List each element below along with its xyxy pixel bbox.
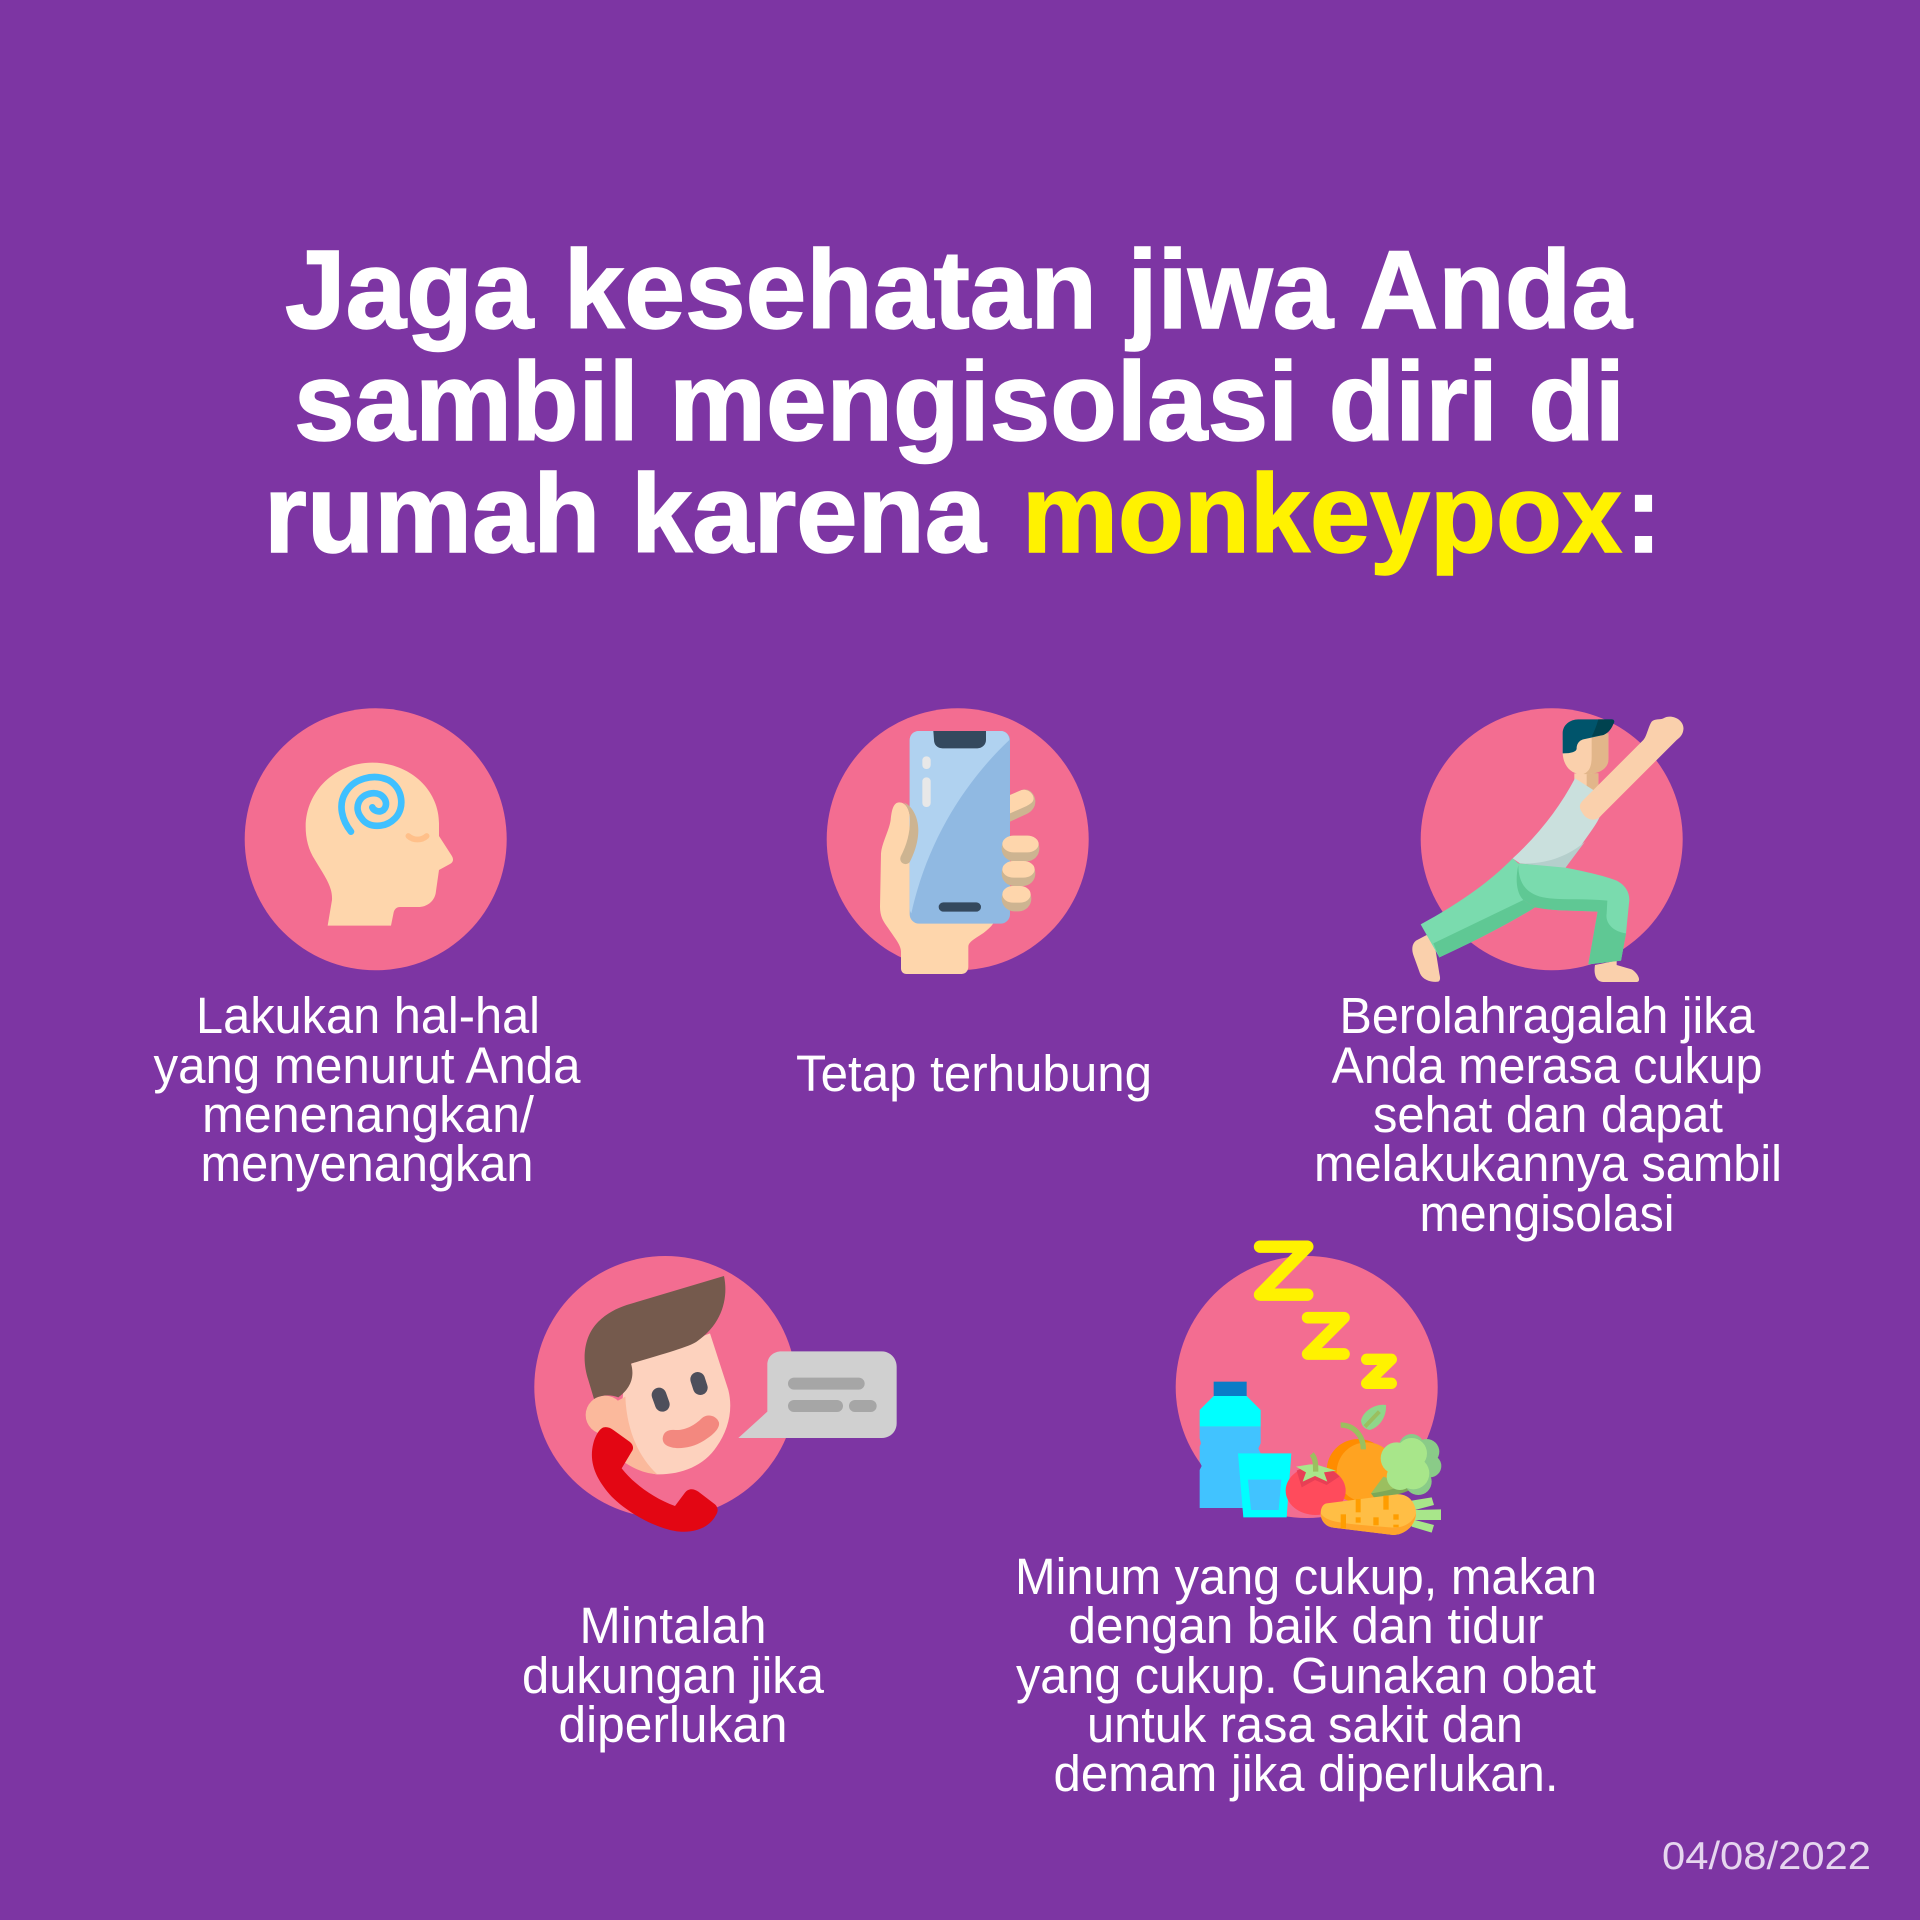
text: drink, eat, sleep: yang cukup. Gunakan obat [1016,1647,1596,1704]
text: drink, eat, sleep: untuk rasa sakit dan [1087,1696,1523,1753]
text: drink, eat, sleep: dengan baik dan tidur [1068,1597,1544,1654]
text: calming activities: yang menurut Anda [154,1037,581,1094]
text: drink, eat, sleep [1015,1548,1597,1802]
text: exercise: mengisolasi [1420,1185,1674,1242]
icon: hand holding phone [827,708,1089,974]
title: monkeypox [1022,452,1622,576]
date: 04/08/2022 [1662,1835,1871,1878]
text: seek support: Mintalah [580,1597,766,1654]
icon: stretching man [1412,708,1683,982]
text: exercise: Anda merasa cukup [1332,1037,1762,1094]
text: calming activities: menyenangkan [200,1135,534,1192]
text: calming activities: Lakukan hal-hal [196,987,540,1044]
icon: sleep and food [1176,1247,1441,1535]
panel: drink, eat, sleep [1015,1247,1597,1802]
panel: calming activities [154,708,581,1192]
text: stay connected: Tetap terhubung [796,1045,1152,1102]
title: : [1625,452,1662,576]
panel: stay connected [796,708,1152,1102]
icon: man on the phone [534,1256,897,1532]
text: exercise: Berolahragalah jika [1340,987,1755,1044]
panel: exercise [1314,708,1782,1242]
title: sambil mengisolasi diri di [294,340,1625,464]
text: calming activities [154,987,581,1192]
text: calming activities: menenangkan/ [202,1086,535,1143]
icon: head with spiral [245,708,507,970]
text: exercise: sehat dan dapat [1373,1086,1723,1143]
text: exercise: melakukannya sambil [1314,1135,1782,1192]
title: rumah karena [264,452,987,576]
text: seek support [522,1597,825,1753]
text: drink, eat, sleep: demam jika diperlukan. [1054,1745,1558,1802]
text: exercise [1314,987,1782,1242]
text: seek support: diperlukan [558,1696,788,1753]
text: seek support: dukungan jika [522,1647,825,1704]
panel: seek support [522,1256,897,1753]
text: drink, eat, sleep: Minum yang cukup, makan [1015,1548,1597,1605]
title: Jaga kesehatan jiwa Anda [285,228,1633,352]
title [264,228,1662,576]
